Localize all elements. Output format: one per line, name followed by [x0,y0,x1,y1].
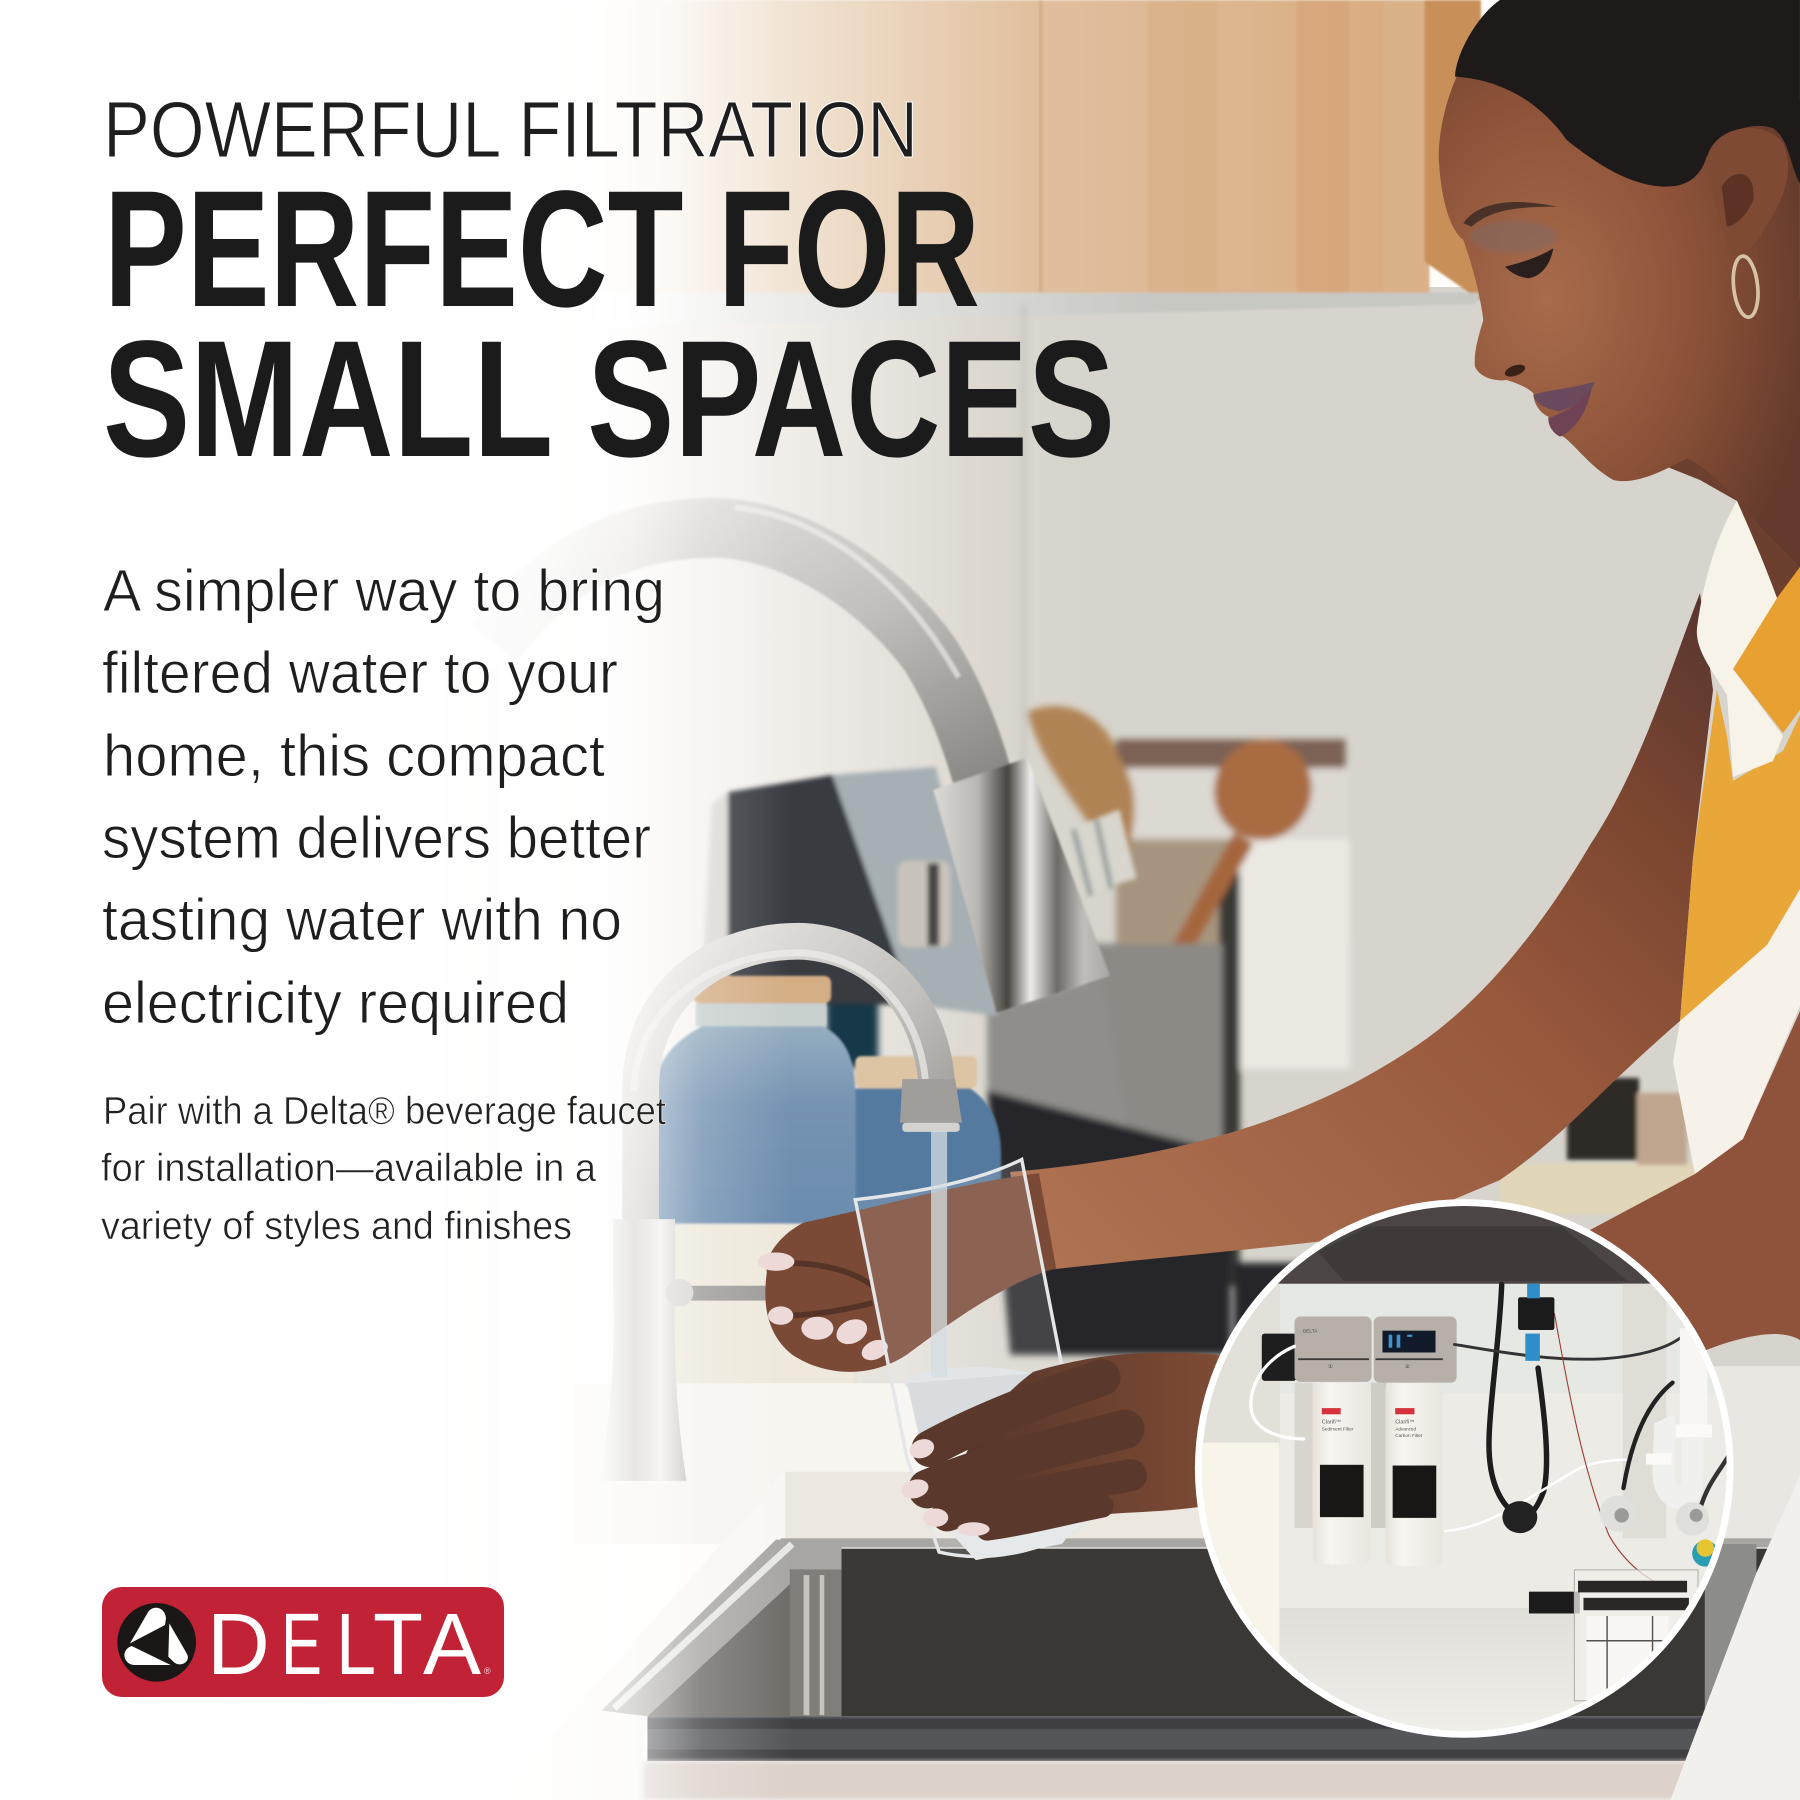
countertop [494,1366,1800,1800]
body copy [102,558,665,1036]
filter cartridges [1313,1383,1442,1566]
filter cartridges: Advanced [1395,1426,1417,1432]
callout: under-sink filter system inset [1194,1199,1734,1738]
woman: head [1439,0,1800,567]
woman: neck [1600,300,1800,598]
filter head units: ② [1405,1364,1410,1370]
filter cartridges: Clarifi™ [1395,1419,1415,1425]
icon: Delta triangle mark [117,1603,196,1682]
wordmark: D [207,1596,270,1693]
wordmark: A [423,1596,481,1693]
ridged canister [1053,809,1137,898]
hair [1455,0,1800,187]
hoses and tubing [1251,1285,1729,1584]
body copy: A simpler way to bring [103,558,665,624]
stainless sink [602,1475,1800,1800]
wood cabinet [540,0,1481,327]
large background faucet [442,507,1110,1607]
heading: perfect for: PERFECT FOR [104,157,980,342]
face [1439,77,1800,567]
woman: blouse [1673,501,1800,1174]
clear storage bin with towels [1529,1539,1718,1701]
drain trap [1600,1328,1712,1536]
eye [1505,248,1553,278]
body copy: system delivers better [102,805,651,871]
eye shadow [1470,221,1557,253]
wall [574,287,1800,1389]
filter head units: DELTA [1303,1328,1318,1334]
kitchen items behind the faucet [827,304,1693,1355]
wordmark: L [336,1596,376,1693]
woman: upper arm [1010,593,1713,1272]
filter head units [1262,1316,1457,1383]
filter cartridges: Clarifi™ [1322,1419,1341,1425]
earring [1730,255,1761,318]
glass [855,1131,1083,1560]
nostril [1503,362,1527,379]
body copy: filtered water to your [102,640,618,706]
wordmark: E [281,1596,322,1693]
white scarf [1697,501,1783,777]
white lower panel [1673,889,1800,1174]
ear [1708,128,1788,250]
lips [1533,382,1595,412]
wordmark: T [373,1596,423,1693]
installation note: Pair with a Delta® beverage faucet [103,1090,666,1133]
yellow upper panel [1733,567,1800,733]
hand on the faucet handle [758,1173,1056,1372]
flow sensor and clips [1502,1284,1554,1533]
yellow lower panel [1680,690,1800,1021]
blurred shelf items behind arm [1500,1078,1700,1214]
beverage faucet [599,941,962,1481]
woman: lower arm [1183,1011,1800,1509]
heading: powerful filtration: POWERFUL FILTRATION [103,85,918,174]
body copy: home, this compact [103,723,605,789]
cabinet interior [1202,1206,1727,1731]
installation note: for installation—available in a [101,1147,596,1190]
eyebrow [1463,202,1557,227]
filter cartridges: Sediment Filter [1322,1426,1354,1432]
storage jars [654,976,1001,1414]
registered mark: ® [484,1666,491,1676]
filter cartridges: Carbon Filter [1395,1433,1423,1439]
heading: small spaces: SMALL SPACES [103,307,1115,492]
installation note [101,1090,666,1248]
logo: Delta badge [102,1587,504,1697]
woman: hands and glass [758,1131,1217,1560]
body copy: tasting water with no [102,887,622,953]
cooktop panel [700,767,999,1016]
installation note: variety of styles and finishes [101,1205,572,1248]
filter head units: ① [1328,1364,1333,1370]
hand holding the glass [899,1352,1217,1536]
body copy: electricity required [102,970,569,1036]
